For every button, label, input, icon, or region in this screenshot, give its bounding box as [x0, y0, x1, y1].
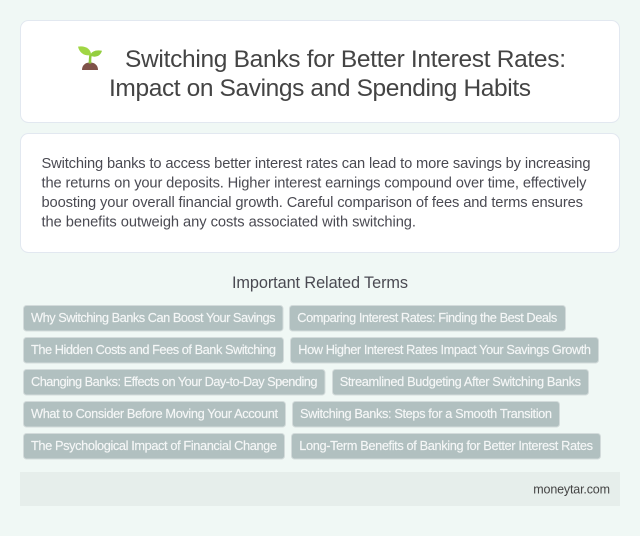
tag: [24, 338, 284, 363]
tag list: [24, 306, 600, 459]
panel: summary paragraph: the returns on your deposits. Higher interest earnings compound over time, effectively: [42, 176, 587, 192]
panel: summary paragraph: the benefits outweigh any costs associated with switching.: [42, 214, 416, 230]
footer source text: moneytar.com: [533, 482, 610, 496]
tag: [24, 306, 283, 331]
tag: Why Switching Banks Can Boost Your Savings: [31, 310, 276, 325]
tag: How Higher Interest Rates Impact Your Savings Growth: [298, 342, 591, 357]
tag: Comparing Interest Rates: Finding the Best Deals: [297, 310, 557, 325]
tag: Streamlined Budgeting After Switching Banks: [340, 374, 581, 389]
heading: title: Switching Banks for Better Interest Rates:: [125, 46, 566, 73]
tag: Long-Term Benefits of Banking for Better Interest Rates: [299, 438, 593, 453]
tag: What to Consider Before Moving Your Account: [31, 406, 278, 421]
heading: important related terms: Important Related Terms: [232, 274, 408, 292]
tag: [24, 434, 284, 459]
panel: summary paragraph: Switching banks to access better interest rates can lead to more savings by increasing: [42, 156, 590, 172]
tag: The Hidden Costs and Fees of Bank Switching: [31, 342, 276, 357]
panel: title card: [20, 20, 620, 122]
tag: [24, 402, 286, 427]
icon: seedling: [78, 46, 102, 70]
tag: [24, 370, 325, 395]
tag: The Psychological Impact of Financial Change: [31, 438, 277, 453]
panel: summary paragraph: [20, 134, 620, 252]
tag: [292, 434, 600, 459]
footer bar: [20, 472, 620, 506]
tag: [292, 402, 560, 427]
heading: title: [109, 46, 566, 102]
heading: title: Impact on Savings and Spending Habits: [109, 75, 531, 102]
panel: summary paragraph: boosting your overall financial growth. Careful comparison of fees and terms ensures: [42, 195, 583, 211]
tag: Switching Banks: Steps for a Smooth Transition: [300, 406, 552, 421]
tag: Changing Banks: Effects on Your Day-to-Day Spending: [31, 374, 318, 389]
tag: [332, 370, 588, 395]
tag: [290, 306, 566, 331]
tag: [290, 338, 598, 363]
